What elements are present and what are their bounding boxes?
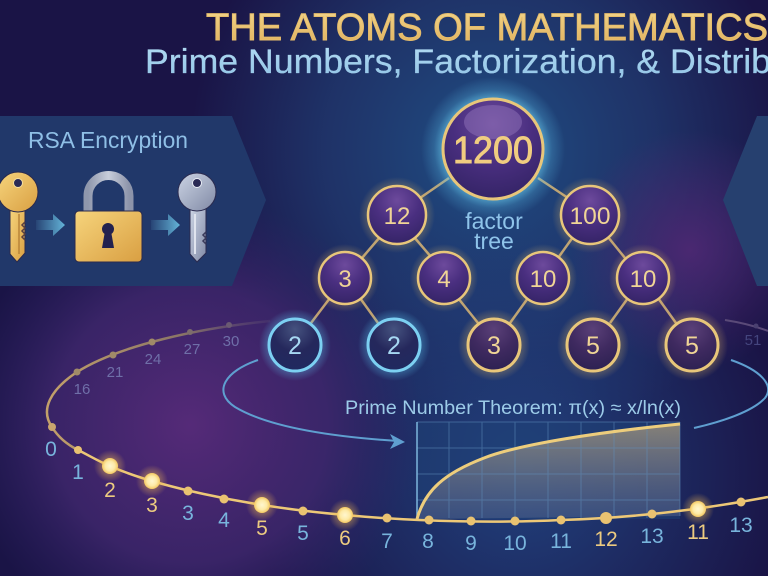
node: 4: 4 (437, 266, 451, 293)
node: 3 (311, 244, 379, 312)
node: prime 5 left (557, 309, 629, 381)
label: factor tree: tree (474, 228, 514, 254)
faded upper labels: 30 (223, 333, 239, 350)
node: prime 5 right (656, 309, 728, 381)
ring back faded arc (47, 321, 270, 450)
gold number labels: 6 (339, 527, 351, 550)
y axis (416, 422, 418, 519)
gold number labels: 11 (687, 521, 709, 544)
glowing prime dots (94, 450, 714, 531)
blue number labels: 1 (72, 461, 84, 484)
node: 100: 100 (570, 203, 610, 230)
node: prime 5 left: 5 (586, 332, 600, 360)
node: prime 2 left: 2 (288, 332, 302, 360)
gold number labels: 2 (104, 479, 116, 502)
node: 12 (359, 177, 435, 253)
number line ring (45, 320, 768, 555)
label: factor tree: factor (465, 208, 523, 234)
node: 3: 3 (338, 266, 352, 293)
chart heading: Prime Number Theorem: Prime Number Theorem: π(x) ≈ x/ln(x) (345, 398, 681, 419)
faded upper labels: 27 (184, 341, 200, 358)
node: 1200 (421, 77, 565, 221)
blue number labels: 13 (729, 514, 753, 537)
node: 10 left: 10 (530, 266, 556, 293)
faded back ticks (74, 322, 758, 376)
arrow: lock to key (151, 214, 180, 236)
shaded area under curve (417, 424, 680, 519)
faded upper labels (74, 332, 761, 398)
node: prime 3: 3 (487, 332, 501, 360)
blue number labels: 10 (503, 532, 527, 555)
blue number labels: 7 (381, 530, 393, 553)
faded upper labels: 16 (74, 381, 90, 398)
blue number labels: 13 (640, 525, 664, 548)
subtitle: Prime Numbers, Factorization, & Distrib (145, 43, 768, 81)
gold number labels: 5 (256, 517, 268, 540)
faded upper labels: 51 (745, 332, 761, 349)
icon: padlock (75, 175, 142, 262)
node: 10 right: 10 (630, 266, 656, 293)
node: prime 2 right: 2 (387, 332, 401, 360)
ring right faded arc (725, 320, 768, 331)
node: 1200: 1200 (453, 130, 533, 172)
factor tree (259, 77, 728, 381)
node: prime 5 right: 5 (685, 332, 699, 360)
arrow: key to lock (36, 214, 65, 236)
node: prime 2 left (259, 309, 331, 381)
tick dots (48, 423, 746, 526)
node: prime 2 right (358, 309, 430, 381)
blue number labels (45, 438, 753, 555)
curve (417, 424, 680, 519)
blue number labels: 5 (297, 522, 309, 545)
icon: silver key (178, 173, 216, 262)
blue number labels: 8 (422, 530, 434, 553)
blue orbit, left (223, 360, 398, 441)
faded upper labels: 24 (145, 351, 161, 368)
ring front arc (78, 450, 768, 522)
blue number labels: 0 (45, 438, 57, 461)
gold number labels (104, 479, 709, 551)
tree branches (311, 178, 676, 323)
node: prime 3 (458, 309, 530, 381)
icon: gold key (0, 172, 38, 262)
node: 10 left (509, 244, 577, 312)
node: 100 (552, 177, 628, 253)
chart: prime counting curve (417, 422, 680, 519)
label: factor tree (465, 208, 523, 254)
panel: RSA encryption (0, 116, 266, 286)
node: 10 right (609, 244, 677, 312)
blue number labels: 3 (182, 502, 194, 525)
panel heading: RSA Encryption: RSA Encryption (28, 127, 188, 153)
blue number labels: 11 (550, 530, 572, 553)
blue number labels: 4 (218, 509, 230, 532)
blue orbit, right (694, 360, 768, 428)
title: THE ATOMS OF MATHEMATICS (206, 7, 768, 49)
node: 4 (410, 244, 478, 312)
blue number labels: 9 (465, 532, 477, 555)
gold number labels: 3 (146, 494, 158, 517)
faded upper labels: 21 (107, 364, 123, 381)
panel: right side, cropped (723, 116, 768, 286)
node: 12: 12 (384, 203, 410, 230)
arrow into chart (390, 434, 405, 449)
gold number labels: 12 (594, 528, 618, 551)
